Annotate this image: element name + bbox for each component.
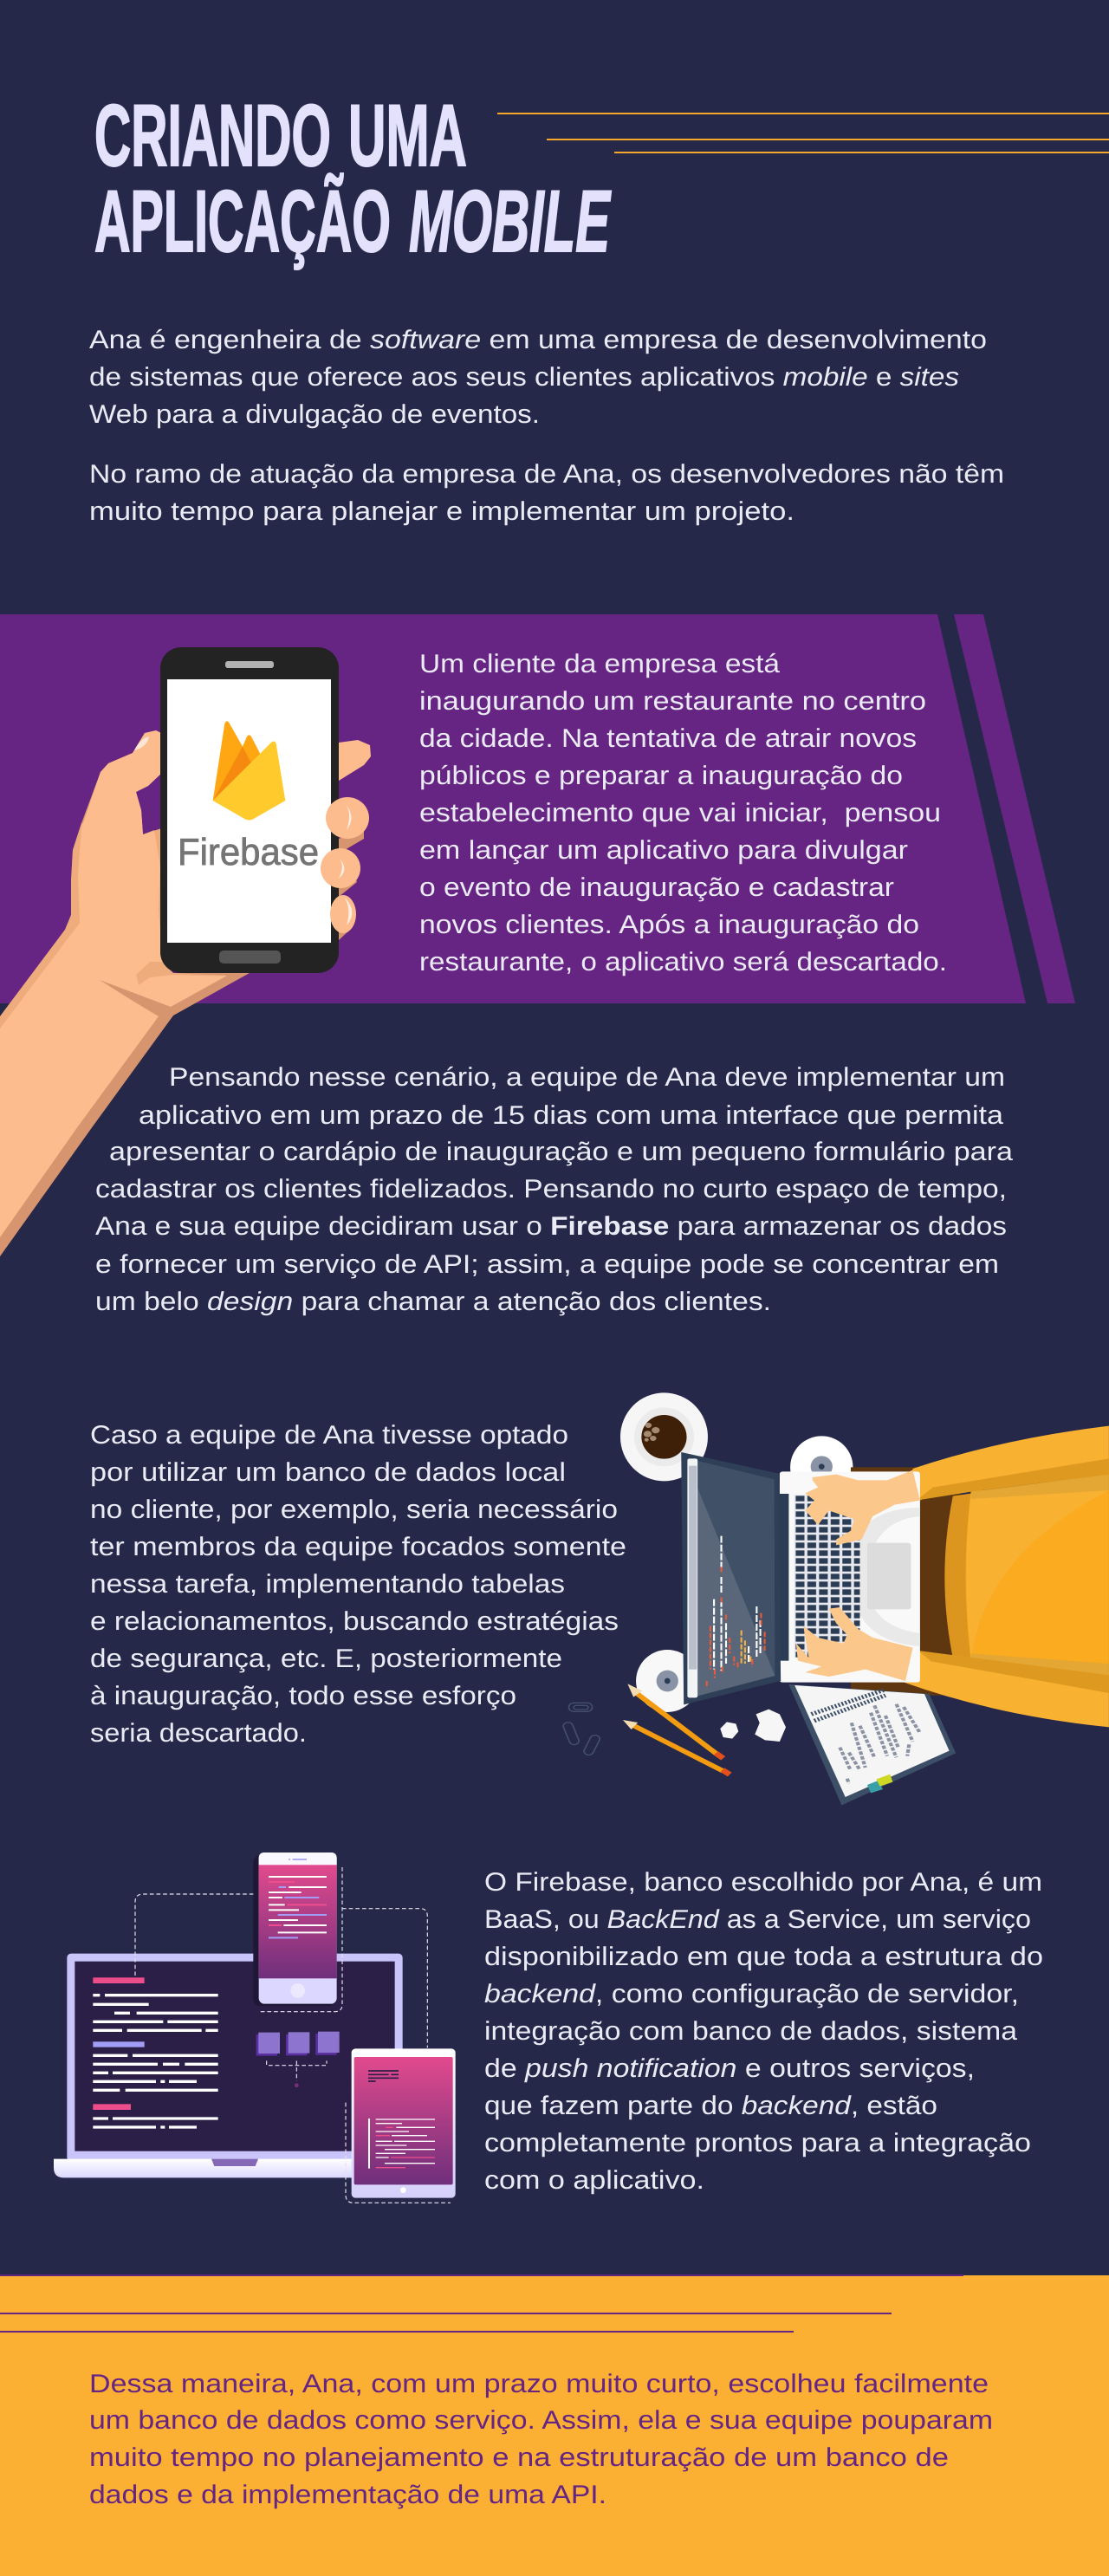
decorative title lines	[497, 113, 1109, 153]
text: banco de dados local: ter membros da equipe focados somente	[90, 1533, 626, 1561]
title: MOBILE	[409, 173, 612, 270]
text: o Firebase: completamente prontos para a integração	[484, 2129, 1031, 2157]
intro text: de sistemas que oferece aos seus clientes aplicativos mobile e sites	[89, 363, 959, 392]
text: o Firebase: com o aplicativo.	[484, 2166, 704, 2195]
hands on keyboard	[796, 1470, 920, 1681]
text: o Firebase: backend , como configuração de servidor,	[484, 1980, 1019, 2008]
intro text: Ana é engenheira de software em uma empresa de desenvolvimento	[89, 326, 987, 354]
footer text: um banco de dados como serviço. Assim, ela e sua equipe pouparam	[89, 2406, 993, 2435]
text: banco de dados local: nessa tarefa, implementando tabelas	[90, 1570, 565, 1599]
panel text: cliente: restaurante, o aplicativo será descartado.	[419, 948, 947, 977]
text: pensando nesse cenário	[95, 1063, 1013, 1316]
title	[94, 88, 612, 270]
text: o Firebase: O Firebase, banco escolhido por Ana, é um	[484, 1868, 1042, 1897]
text: banco de dados local: e relacionamentos, buscando estratégias	[90, 1607, 619, 1636]
intro text	[89, 326, 1004, 526]
dashed connectors	[135, 1867, 427, 2081]
text: o Firebase: disponibilizado em que toda a estrutura do	[484, 1943, 1043, 1971]
text: banco de dados local: por utilizar um banco de dados local	[90, 1458, 566, 1487]
laptop base and keyboard	[775, 1471, 920, 1683]
text: o Firebase: que fazem parte do backend , estão	[484, 2092, 937, 2120]
title: APLICAÇÃO	[94, 173, 391, 270]
panel: orange footer	[0, 2275, 1109, 2576]
text: banco de dados local: no cliente, por exemplo, seria necessário	[90, 1496, 618, 1524]
crumpled paper	[720, 1710, 786, 1742]
tablet device	[352, 2048, 456, 2198]
text: pensando nesse cenário: Ana e sua equipe decidiram usar o Firebase para armazenar os dados	[95, 1212, 1007, 1241]
Firebase logo	[213, 721, 285, 820]
footer text: dados e da implementação de uma API.	[89, 2481, 606, 2509]
panel text: cliente	[419, 650, 947, 977]
intro text: No ramo de atuação da empresa de Ana, os desenvolvedores não têm	[89, 460, 1004, 489]
text: o Firebase	[484, 1868, 1043, 2195]
phone device	[253, 1853, 337, 2006]
intro text: muito tempo para planejar e implementar um projeto.	[89, 497, 794, 526]
text: pensando nesse cenário: um belo design para chamar a atenção dos clientes.	[95, 1288, 771, 1316]
text: pensando nesse cenário: aplicativo em um prazo de 15 dias com uma interface que permita	[139, 1101, 1003, 1130]
paper clips	[562, 1703, 601, 1756]
panel: purple band	[0, 614, 1075, 1003]
text: banco de dados local: à inauguração, todo esse esforço	[90, 1682, 516, 1710]
fingers	[321, 740, 371, 940]
text: banco de dados local: seria descartado.	[90, 1719, 307, 1748]
footer lines	[0, 2274, 963, 2333]
Firebase wordmark: Firebase	[178, 831, 319, 873]
panel text: cliente: o evento de inauguração e cadastrar	[419, 873, 894, 902]
illustration: multi-device screens	[54, 1853, 456, 2203]
panel text: cliente: Um cliente da empresa está	[419, 650, 780, 678]
arm and palm	[0, 730, 250, 1256]
text: pensando nesse cenário: cadastrar os clientes fidelizados. Pensando no curto espaço de tempo,	[95, 1175, 1007, 1204]
panel text: cliente: novos clientes. Após a inauguração do	[419, 911, 919, 939]
panel text: cliente: públicos e preparar a inauguração do	[419, 762, 903, 790]
footer text: Dessa maneira, Ana, com um prazo muito curto, escolheu facilmente	[89, 2370, 989, 2398]
coffee cup	[620, 1392, 708, 1481]
notebook	[788, 1684, 956, 1805]
panel text: cliente: inaugurando um restaurante no centro	[419, 687, 926, 716]
title: CRIANDO	[94, 88, 331, 185]
text: banco de dados local: Caso a equipe de Ana tivesse optado	[90, 1421, 568, 1450]
panel text: cliente: da cidade. Na tentativa de atrair novos	[419, 724, 917, 753]
compact discs	[636, 1436, 853, 1712]
text: o Firebase: integração com banco de dados, sistema	[484, 2017, 1017, 2046]
phone	[160, 647, 339, 973]
text: banco de dados local	[90, 1421, 626, 1748]
laptop screen with code	[681, 1452, 781, 1704]
footer text: muito tempo no planejamento e na estruturação de um banco de	[89, 2443, 949, 2472]
footer text	[89, 2370, 993, 2509]
title: UMA	[348, 88, 467, 185]
tablet dashed connector	[346, 2103, 451, 2203]
desktop laptop	[54, 1954, 403, 2177]
illustration: person typing on laptop	[562, 1392, 1109, 1805]
text: o Firebase: de push notification e outros serviços,	[484, 2054, 975, 2083]
intro text: Web para a divulgação de eventos.	[89, 400, 540, 429]
text: pensando nesse cenário: Pensando nesse cenário, a equipe de Ana deve implementar um	[169, 1063, 1005, 1092]
text: pensando nesse cenário: e fornecer um serviço de API; assim, a equipe pode se concentrar em	[95, 1250, 999, 1279]
text: banco de dados local: de segurança, etc. E, posteriormente	[90, 1645, 562, 1673]
panel text: cliente: estabelecimento que vai iniciar, pensou	[419, 799, 941, 827]
panel text: cliente: em lançar um aplicativo para divulgar	[419, 836, 908, 865]
body and sweater	[851, 1426, 1109, 1727]
text: pensando nesse cenário: apresentar o cardápio de inauguração e um pequeno formulário para	[109, 1138, 1013, 1166]
text: o Firebase: BaaS, ou BackEnd as a Service, um serviço	[484, 1905, 1031, 1934]
connection squares	[256, 2032, 340, 2087]
illustration: hand holding phone	[0, 647, 371, 1256]
pencils	[623, 1684, 730, 1775]
